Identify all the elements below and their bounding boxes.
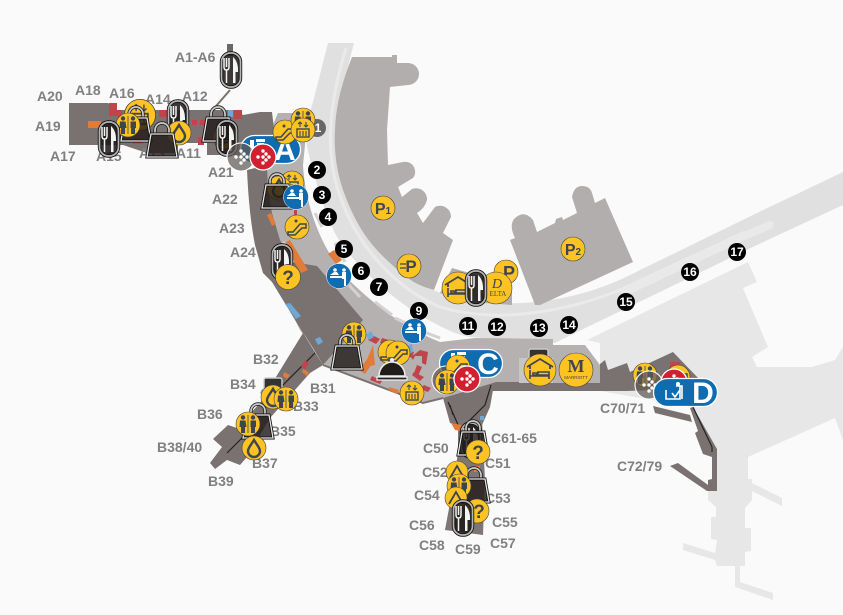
icon: elevator B — [400, 381, 424, 405]
stop 7 — [370, 278, 388, 296]
pier A link — [210, 90, 230, 113]
icon: escalator B — [386, 341, 410, 365]
icon: Marriott hotel: M — [568, 356, 584, 376]
terminal dark areas — [69, 44, 717, 535]
icon: Delta hotel: D — [491, 277, 502, 292]
icon: information A24: ? — [282, 268, 294, 289]
icon: parking near hotel — [494, 260, 518, 284]
gate A20: A20 — [37, 88, 63, 104]
icon: park and ride — [397, 254, 421, 278]
stop 11 — [459, 317, 477, 335]
apron and ghost concourse — [587, 262, 843, 600]
stop 4: 4 — [325, 210, 332, 224]
icon: shop A16 — [121, 107, 151, 141]
stop 2: 2 — [314, 163, 321, 177]
gate B31: B31 — [310, 380, 336, 396]
gate B37: B37 — [252, 455, 278, 471]
gate C59: C59 — [455, 541, 481, 557]
parking garage P2 — [510, 186, 633, 305]
stop 1 — [308, 119, 326, 137]
stop 16: 16 — [683, 265, 697, 279]
icon: elevator A22 — [280, 171, 304, 195]
gate A1-A6: A1-A6 — [175, 49, 216, 65]
gate A18: A18 — [75, 82, 101, 98]
icon: Marriott hotel: MARRIOTT — [564, 375, 588, 380]
gate C51: C51 — [485, 455, 511, 471]
ribbon stripes — [283, 213, 440, 338]
icon: restaurant C50 — [462, 423, 480, 457]
C-D bar — [493, 352, 700, 391]
icon: yellow service C52 — [446, 461, 468, 483]
icon: restrooms B36 — [236, 412, 260, 436]
concourse B — [210, 333, 323, 469]
icon: water B34 — [261, 385, 285, 409]
A pier tip — [227, 44, 233, 56]
icon: information C51: ? — [472, 443, 484, 464]
stop 15: 15 — [619, 295, 633, 309]
icon: parking P2 — [561, 237, 585, 261]
stop 5: 5 — [341, 242, 348, 256]
icon: shop A22 — [262, 174, 292, 208]
badge: terminal C — [440, 348, 502, 381]
badge: terminal A — [240, 134, 300, 167]
gate A12: A12 — [182, 88, 208, 104]
badge: terminal A: A — [274, 134, 296, 167]
stop 6 — [352, 262, 370, 280]
icon: parking P1: P1 — [375, 201, 392, 218]
gate A13: A13 — [139, 145, 165, 161]
icon: restrooms A16 — [116, 113, 140, 137]
gate C61-65: C61-65 — [491, 430, 537, 446]
stop 13 — [530, 319, 548, 337]
icon: water A12 — [167, 121, 191, 145]
icon: shop A11 — [203, 107, 233, 141]
stop 6: 6 — [358, 264, 365, 278]
icon: escalator A23 — [285, 215, 309, 239]
gate C54: C54 — [414, 487, 440, 503]
icon: shop B35 — [243, 404, 273, 438]
stop 11: 11 — [462, 319, 475, 333]
concourse D — [653, 406, 717, 491]
icon: yellow service A11 — [213, 125, 237, 149]
icon: yellow service C — [446, 355, 470, 379]
stop 16 — [681, 263, 699, 281]
icon: gray connector A — [227, 143, 255, 171]
stop 9 — [410, 302, 428, 320]
gate A21: A21 — [208, 164, 234, 180]
icon: shop C61-65 — [458, 421, 488, 455]
icon: hotel Delta — [442, 272, 474, 304]
gate C56: C56 — [409, 517, 435, 533]
gate C52: C52 — [422, 464, 448, 480]
gate B33: B33 — [293, 398, 319, 414]
icon: ticket desk B — [326, 264, 352, 288]
stop 12 — [488, 318, 506, 336]
gate A22: A22 — [212, 191, 238, 207]
icon: yellow service A22 — [267, 176, 291, 200]
icon: restaurant A24 — [272, 245, 292, 279]
stop 17 — [728, 243, 746, 261]
stop 12: 12 — [490, 320, 504, 334]
icon: information C55: ? — [473, 502, 485, 523]
badge: terminal D — [654, 377, 718, 410]
badge: terminal D: D — [692, 377, 714, 410]
icon: ticket desk A22 — [284, 184, 308, 210]
icon: restrooms B33 — [274, 387, 298, 411]
shops — [88, 103, 680, 472]
gate A16: A16 — [109, 85, 135, 101]
icon: red connector C — [454, 366, 480, 392]
icon: escalator A — [273, 120, 297, 144]
gate C53: C53 — [485, 490, 511, 506]
gate A17: A17 — [50, 148, 76, 164]
icon: restaurant C59 — [454, 501, 472, 535]
icon: ticket desk C — [402, 318, 426, 344]
gate C55: C55 — [492, 514, 518, 530]
landside road — [307, 43, 843, 343]
icon: parking P1 — [371, 196, 395, 220]
stop 5 — [335, 240, 353, 258]
icon: lounge A — [291, 108, 315, 132]
gate A14: A14 — [145, 91, 171, 107]
gate B38/40: B38/40 — [157, 439, 202, 455]
icon: information A24 — [276, 264, 300, 290]
curved connector and hub — [247, 165, 363, 365]
icon: lounge A16 — [124, 99, 156, 131]
icon: restaurant A11 — [218, 121, 236, 155]
gate C72/79: C72/79 — [617, 458, 662, 474]
terminal frontage ribbon — [262, 113, 600, 403]
stop 2 — [308, 161, 326, 179]
icon: box hotel — [529, 349, 548, 363]
stop 17: 17 — [730, 245, 744, 259]
icon: Delta hotel: ELTA — [490, 290, 506, 298]
gate C50: C50 — [423, 440, 449, 456]
stop 14: 14 — [562, 318, 576, 332]
icon: red connector A — [250, 144, 276, 170]
road stop markers — [308, 119, 746, 337]
parking garage P1 — [335, 55, 453, 290]
stop 13: 13 — [532, 321, 546, 335]
icon: yellow service C54 — [445, 487, 467, 509]
icon: parking P2: P2 — [565, 242, 582, 259]
icon: shop C53 — [459, 468, 489, 502]
gate B34: B34 — [230, 376, 256, 392]
icon: restaurant A17 — [100, 122, 118, 156]
stop 3 — [313, 186, 331, 204]
stop 15 — [617, 293, 635, 311]
gate labels — [35, 49, 662, 557]
icon: red connector D — [661, 369, 687, 395]
icon: restaurant A1-A6 — [222, 53, 240, 87]
stop 3: 3 — [319, 188, 326, 202]
frontage edge — [323, 365, 443, 403]
gate A24: A24 — [230, 244, 256, 260]
icon: parking near hotel: P — [503, 263, 515, 283]
icon: dining cloche B — [377, 358, 407, 380]
stop 7: 7 — [376, 280, 383, 294]
C connector — [443, 383, 493, 425]
icon: gray connector D — [635, 371, 663, 399]
icon: Marriott hotel — [559, 353, 593, 387]
icon: elevator A — [291, 118, 315, 142]
icon: hotel C — [524, 354, 556, 386]
stop 14 — [560, 316, 578, 334]
gate A15: A15 — [96, 148, 122, 164]
icon: restrooms C54 — [447, 474, 471, 498]
gate B39: B39 — [208, 473, 234, 489]
icon: restrooms C — [435, 370, 459, 394]
icon: park and ride: P — [405, 257, 417, 276]
concourse walls — [227, 353, 712, 453]
icon: shop B — [332, 335, 362, 369]
icon: Delta hotel — [480, 272, 512, 304]
concourse A — [69, 103, 275, 160]
badge: terminal C: C — [477, 348, 499, 381]
stop 1: 1 — [315, 121, 322, 135]
icon: restrooms B — [342, 322, 366, 346]
icon: restaurant A12 — [168, 101, 188, 135]
hotel block — [440, 268, 512, 305]
icon: yellow service D — [666, 365, 690, 389]
gate C70/71: C70/71 — [600, 400, 645, 416]
frontage lights — [519, 358, 553, 383]
stop 9: 9 — [416, 304, 423, 318]
icon: lounge B — [378, 340, 402, 364]
stop 4 — [319, 208, 337, 226]
concourse C — [445, 420, 485, 535]
gate B35: B35 — [270, 423, 296, 439]
gate A23: A23 — [219, 220, 245, 236]
gate A11: A11 — [176, 145, 201, 161]
icon: information C51 — [466, 440, 490, 464]
gate B32: B32 — [253, 351, 279, 367]
icon: box B34 — [264, 378, 282, 396]
icon: water B37 — [242, 436, 266, 460]
icon: shop A13 — [147, 123, 177, 157]
icon: gray connector C — [432, 366, 460, 394]
gate A19: A19 — [35, 118, 61, 134]
icon: restaurant hotel — [466, 271, 486, 305]
gate B36: B36 — [197, 406, 223, 422]
icon: lounge D — [633, 363, 657, 387]
icon: information C55 — [465, 499, 489, 523]
gate C58: C58 — [419, 537, 445, 553]
gate C57: C57 — [490, 535, 516, 551]
